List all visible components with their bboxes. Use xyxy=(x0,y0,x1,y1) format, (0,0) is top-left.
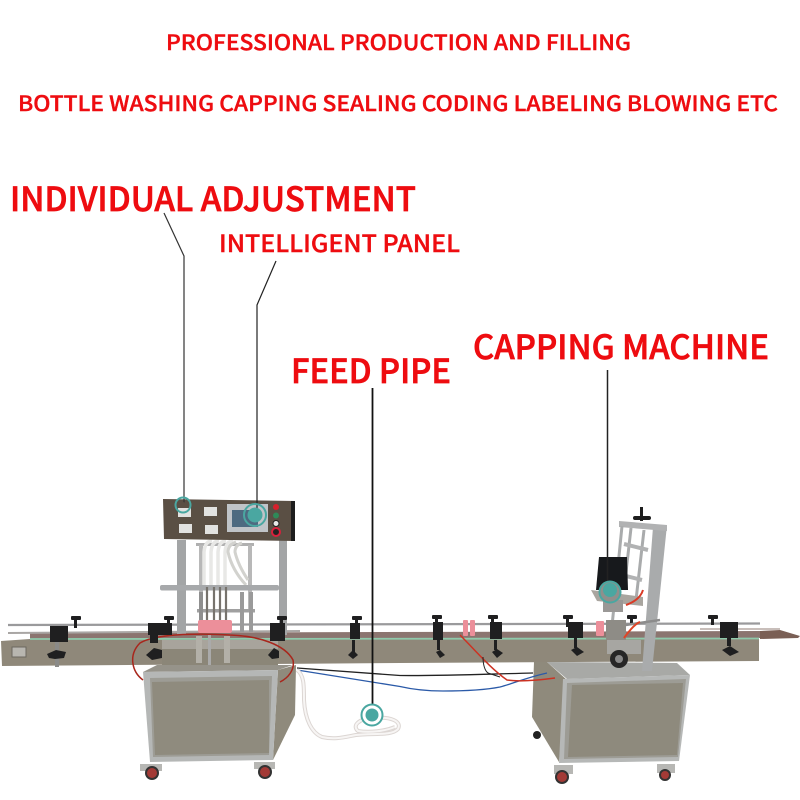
marker: capping machine xyxy=(600,582,620,602)
leader line: feed pipe xyxy=(372,388,374,704)
label: feed pipe: FEED PIPE xyxy=(291,345,451,393)
marker: individual adjustment xyxy=(176,498,190,512)
heading: professional production: PROFESSIONAL PRODUCTION AND FILLING xyxy=(166,27,631,57)
label: intelligent panel: INTELLIGENT PANEL xyxy=(219,224,460,259)
leader line: capping machine xyxy=(606,370,608,585)
heading: process list: BOTTLE WASHING CAPPING SEALING CODING LABELING BLOWING ETC xyxy=(18,88,778,118)
bottles xyxy=(463,620,604,636)
marker: intelligent panel xyxy=(244,504,266,526)
marker: feed pipe xyxy=(362,704,382,726)
leader line: intelligent panel xyxy=(257,261,276,512)
capping cabinet xyxy=(532,662,690,783)
hoses xyxy=(297,635,555,738)
filling cabinet xyxy=(140,665,296,779)
conveyor clamps xyxy=(47,615,739,667)
machine illustration xyxy=(1,499,800,783)
leader line: individual adjustment xyxy=(164,213,184,505)
conveyor xyxy=(1,624,800,666)
filling frame and nozzles xyxy=(160,540,287,635)
label: capping machine: CAPPING MACHINE xyxy=(473,321,769,369)
control panel xyxy=(163,499,295,541)
label: individual adjustment: INDIVIDUAL ADJUSTMENT xyxy=(10,173,416,221)
capping machine xyxy=(591,507,667,671)
filling rail xyxy=(133,634,293,682)
